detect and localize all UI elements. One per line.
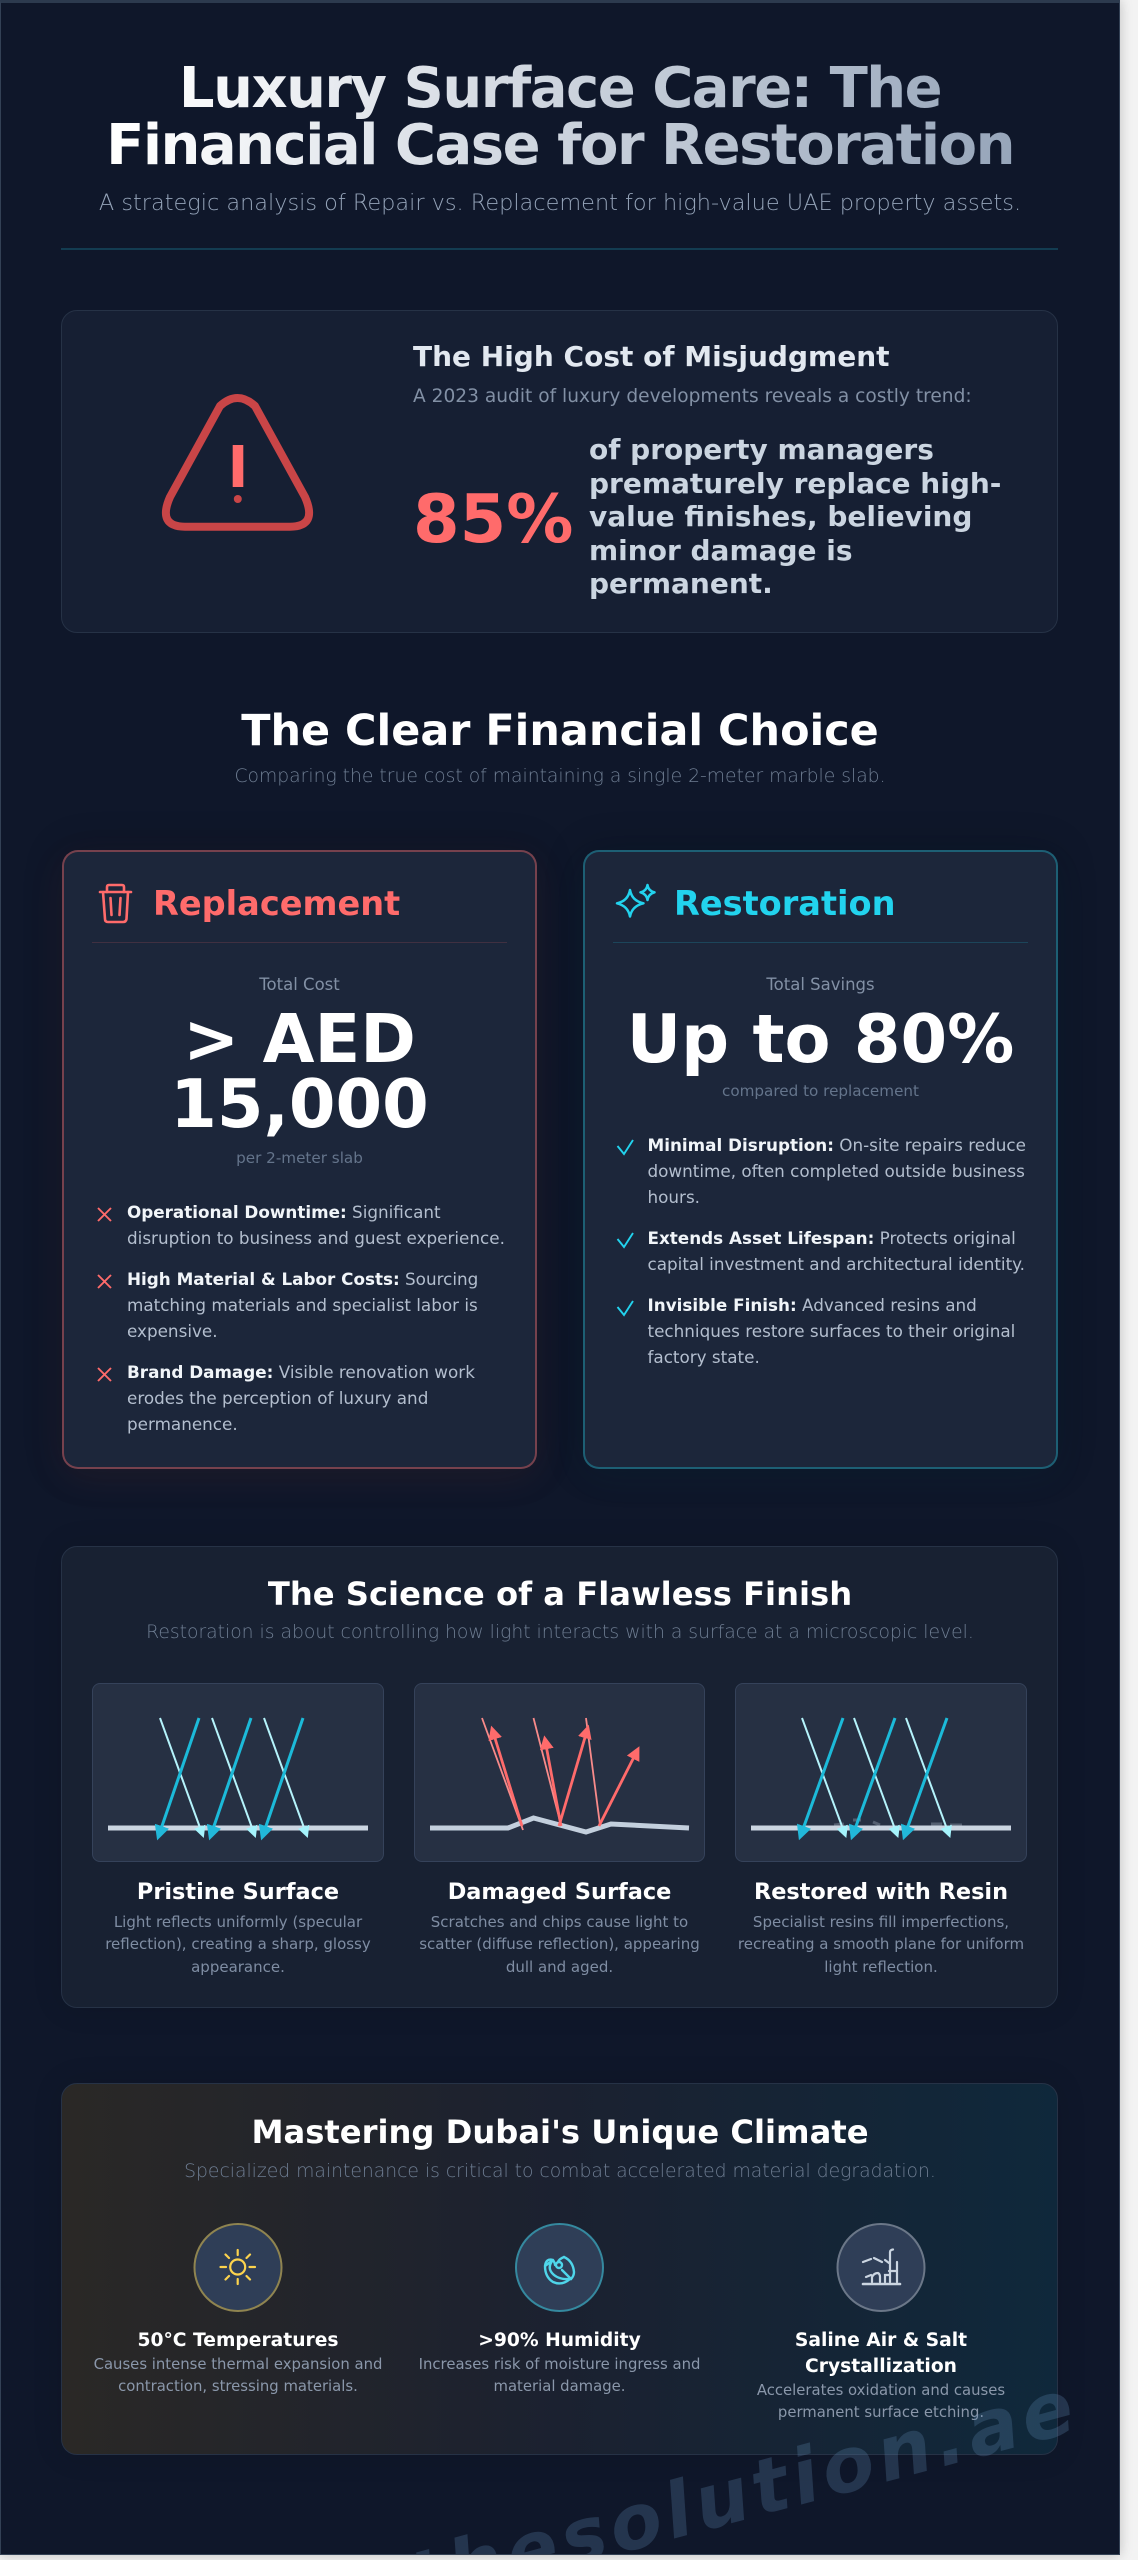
benefit: finish: factory state.	[648, 1347, 760, 1367]
section subtitle: Comparing the true cost of maintaining a single 2-meter marble slab.	[234, 766, 886, 787]
drawback: downtime: Operational Downtime: Significant	[127, 1202, 441, 1222]
pristine text	[105, 1913, 371, 1976]
humidity title: >90% Humidity	[478, 2330, 641, 2350]
diagram: restored surface	[735, 1683, 1027, 1862]
total savings label: Total Savings	[766, 975, 875, 994]
climate subtitle: Specialized maintenance is critical to combat accelerated material degradation.	[184, 2161, 936, 2182]
benefit: disruption: hours.	[648, 1187, 700, 1207]
benefit: lifespan	[648, 1228, 1025, 1274]
title: Luxury Surface Care: The	[179, 56, 941, 121]
restoration benefits list	[616, 1135, 1026, 1367]
diagram: pristine surface	[92, 1683, 384, 1862]
restored text: light reflection.	[824, 1958, 938, 1976]
panel heading: The High Cost of Misjudgment	[413, 340, 890, 373]
diagram: damaged surface	[414, 1683, 705, 1862]
drawback: costs: High Material & Labor Costs: Sourcing	[127, 1269, 478, 1289]
cost caption: per 2-meter slab	[236, 1149, 363, 1167]
savings caption: compared to replacement	[722, 1082, 919, 1100]
statistic description: of property managers	[589, 433, 934, 466]
benefit: finish	[648, 1295, 1015, 1367]
science heading: The Science of a Flawless Finish	[268, 1575, 852, 1613]
panel: high cost of misjudgment	[61, 310, 1058, 633]
humidity text: material damage.	[493, 2377, 626, 2395]
damaged text: scatter (diffuse reflection), appearing	[419, 1935, 700, 1953]
temperature title: 50°C Temperatures	[137, 2330, 339, 2350]
reflection chart: damaged	[430, 1718, 690, 1835]
reflection chart: pristine	[108, 1718, 368, 1840]
benefit: lifespan: capital investment and architectural identity.	[648, 1254, 1025, 1274]
damaged text	[419, 1913, 700, 1976]
temperature text: Causes intense thermal expansion and	[94, 2355, 382, 2373]
statistic description: value finishes, believing	[589, 500, 972, 533]
restored text: Specialist resins fill imperfections,	[753, 1913, 1009, 1931]
panel intro text: A 2023 audit of luxury developments reveals a costly trend:	[413, 386, 972, 407]
benefit: disruption: downtime, often completed outside business	[648, 1161, 1025, 1181]
drawback: brand	[127, 1362, 475, 1434]
salt air text: permanent surface etching.	[778, 2403, 984, 2421]
damaged text: Scratches and chips cause light to	[431, 1913, 688, 1931]
total cost value: > AED	[183, 1000, 416, 1078]
total cost label: Total Cost	[259, 975, 340, 994]
panel: science of flawless finish	[61, 1546, 1058, 2008]
statistic description: minor damage is	[589, 534, 853, 567]
climate heading: Mastering Dubai's Unique Climate	[251, 2113, 869, 2151]
pristine text: Light reflects uniformly (specular	[114, 1913, 362, 1931]
salt air text	[757, 2381, 1005, 2421]
restoration heading: Restoration	[674, 884, 896, 922]
salt air title: Crystallization	[805, 2356, 957, 2377]
replacement heading: Replacement	[153, 884, 400, 922]
humidity text: Increases risk of moisture ingress and	[419, 2355, 700, 2373]
salt air title	[795, 2330, 967, 2377]
section heading: financial choice: The Clear Financial Choice	[241, 706, 879, 756]
statistic description: permanent.	[589, 567, 773, 600]
title: Financial Case for Restoration	[106, 113, 1014, 178]
title	[0, 60, 1120, 174]
salt air title: Saline Air & Salt	[795, 2330, 967, 2351]
temperature text	[94, 2355, 382, 2395]
reflection chart: restored	[751, 1718, 1011, 1840]
temperature text: contraction, stressing materials.	[118, 2377, 358, 2395]
icon: cross 1	[97, 1207, 112, 1222]
drawback: brand: permanence.	[127, 1414, 238, 1434]
benefit: disruption	[648, 1135, 1026, 1207]
total cost value	[170, 1000, 429, 1142]
damaged title: Damaged Surface	[448, 1879, 671, 1905]
icon: sparkles	[616, 884, 656, 918]
restored text: recreating a smooth plane for uniform	[738, 1935, 1024, 1953]
icon: check 2	[616, 1232, 634, 1249]
drawback: costs: matching materials and specialist labor is	[127, 1295, 478, 1315]
icon: check 3	[616, 1300, 634, 1317]
benefit: disruption: Minimal Disruption: On-site repairs reduce	[648, 1135, 1026, 1155]
total cost value: 15,000	[170, 1064, 429, 1142]
icon: warning triangle	[162, 394, 314, 531]
salt air text: Accelerates oxidation and causes	[757, 2381, 1005, 2399]
statistic description	[589, 433, 1001, 600]
restored text	[738, 1913, 1024, 1976]
pristine title: Pristine Surface	[137, 1879, 339, 1905]
drawback: downtime: disruption to business and guest experience.	[127, 1228, 505, 1248]
statistic description: prematurely replace high-	[589, 467, 1001, 500]
drawback: costs	[127, 1269, 478, 1341]
total savings value: Up to 80%	[627, 1000, 1014, 1078]
subtitle: A strategic analysis of Repair vs. Replacement for high-value UAE property assets.	[99, 190, 1021, 216]
drawback: costs: expensive.	[127, 1321, 218, 1341]
benefit: finish: Invisible Finish: Advanced resins and	[648, 1295, 977, 1315]
benefit: lifespan: Extends Asset Lifespan: Protects original	[648, 1228, 1016, 1248]
benefit: finish: techniques restore surfaces to their original	[648, 1321, 1015, 1341]
damaged text: dull and aged.	[506, 1958, 613, 1976]
icon: cross 2	[97, 1274, 112, 1289]
drawback: brand: Brand Damage: Visible renovation work	[127, 1362, 475, 1382]
panel: dubai climate	[61, 2083, 1058, 2455]
icon: cross 3	[97, 1367, 112, 1382]
science subtitle: Restoration is about controlling how light interacts with a surface at a microscopic level.	[146, 1622, 974, 1643]
restored title: Restored with Resin	[754, 1879, 1008, 1905]
statistic 85%: 85%	[413, 480, 573, 558]
humidity text	[419, 2355, 700, 2395]
panel: restoration	[583, 850, 1058, 1469]
icon: trash	[98, 884, 132, 924]
panel: replacement	[62, 850, 537, 1469]
replacement drawbacks list	[97, 1202, 505, 1434]
pristine text: appearance.	[191, 1958, 285, 1976]
drawback: downtime	[127, 1202, 505, 1248]
drawback: brand: erodes the perception of luxury and	[127, 1388, 428, 1408]
icon: check 1	[616, 1140, 634, 1156]
pristine text: reflection), creating a sharp, glossy	[105, 1935, 371, 1953]
